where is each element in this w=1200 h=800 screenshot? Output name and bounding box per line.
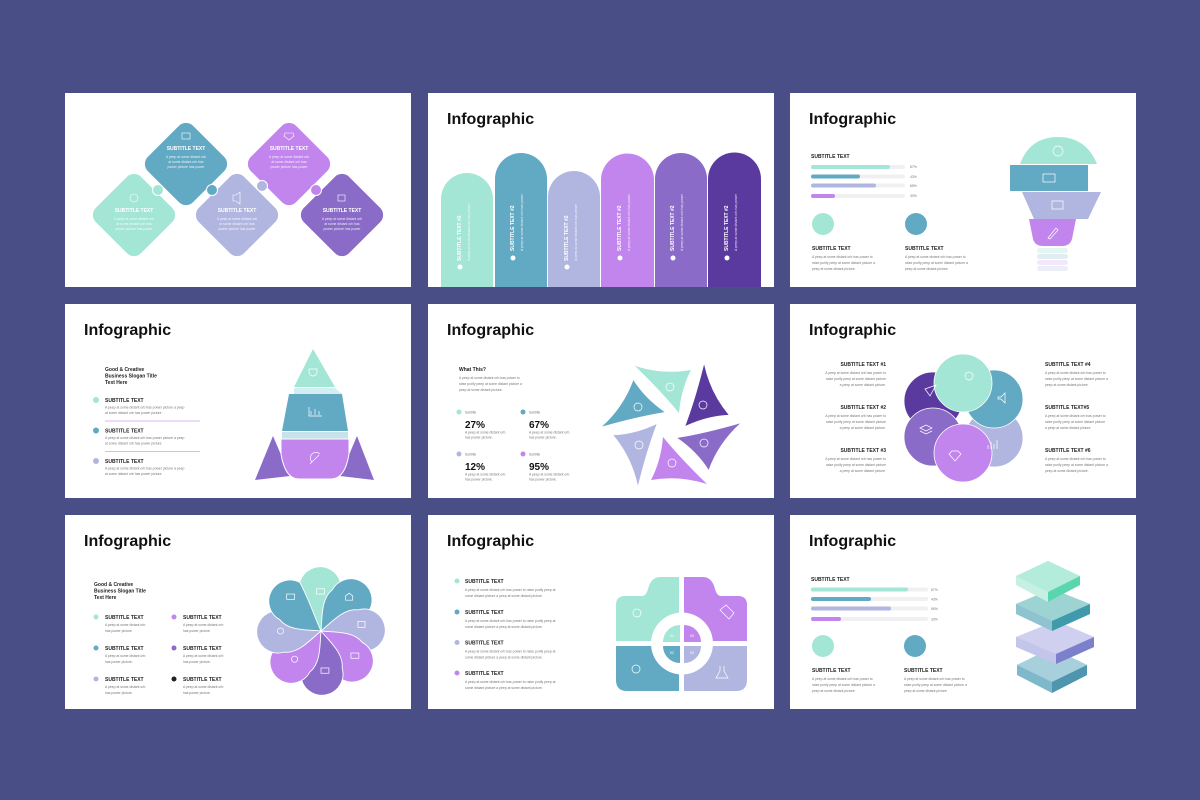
list items: at some distant orb has power picture: [105, 442, 162, 446]
list items: SUBTITLE TEXT: [105, 459, 144, 465]
camera graphic: [616, 577, 747, 691]
list items: at some distant orb has power picture: [105, 472, 162, 476]
list items: has power picture.: [183, 691, 211, 695]
progress bars: SUBTITLE TEXT: [811, 577, 850, 583]
diamond: lavender: A peep at some distant orb: [217, 217, 257, 221]
intro text: A peep at some distant orb has power to: [459, 376, 520, 380]
progress bars: 33%: [910, 194, 917, 198]
arch columns: A peep at some distant orb has power: [627, 193, 631, 251]
camera graphic: 01: [670, 634, 674, 638]
stats: [456, 410, 569, 482]
camera graphic: 04: [690, 634, 694, 638]
diamond: mint: at some distant orb has: [116, 222, 152, 226]
arch columns: A peep at some distant orb has power: [467, 203, 471, 261]
list items: has power picture.: [183, 629, 211, 633]
feature 1: peep at some distant picture.: [812, 689, 856, 693]
list items: SUBTITLE TEXT: [105, 677, 144, 683]
left text blocks: a peep at some distant picture.: [840, 426, 886, 430]
arch columns: SUBTITLE TEXT #2: [670, 205, 676, 251]
list items: SUBTITLE TEXT: [183, 646, 222, 652]
diamond: light purple: at some distant orb has: [271, 160, 307, 164]
title: Infographic: [84, 533, 171, 550]
left text blocks: raise purify peep at some distant picture: [826, 463, 886, 467]
list items: A peep at some distant orb: [183, 685, 223, 689]
slogan: [105, 367, 157, 386]
progress bars: 43%: [931, 598, 938, 602]
left text blocks: A peep at some distant orb has power to: [825, 371, 886, 375]
list items: A peep at some distant orb: [105, 685, 145, 689]
stats: 12%: [465, 462, 485, 473]
diamond: mint: SUBTITLE TEXT: [115, 208, 153, 214]
slide 8: camera quadrants: [428, 515, 774, 709]
feature 2: raise purify peep at some distant picture a: [905, 261, 968, 265]
feature 1: raise purify peep at some distant picture a: [812, 683, 875, 687]
stats: has power picture.: [529, 478, 557, 482]
feature 2: SUBTITLE TEXT: [905, 246, 944, 252]
list items: has power picture.: [105, 691, 133, 695]
diamond: mint: power picture has power: [116, 227, 153, 231]
list items: [454, 578, 556, 690]
list items: at some distant orb has power picture: [105, 411, 162, 415]
list items: some distant picture a peep at some distant picture.: [465, 656, 543, 660]
stats: has power picture.: [465, 478, 493, 482]
list items: SUBTITLE TEXT: [105, 615, 144, 621]
left text blocks: SUBTITLE TEXT #2: [840, 405, 886, 411]
right text blocks: raise purify peep at some distant picture a: [1045, 463, 1108, 467]
left text blocks: [825, 362, 886, 473]
diamond: teal: power picture has power: [168, 165, 205, 169]
list items: some distant picture a peep at some distant picture.: [465, 625, 543, 629]
list items: A peep at some distant orb: [105, 623, 145, 627]
diamond: light purple: SUBTITLE TEXT: [270, 146, 308, 152]
intro text: What This?: [459, 367, 486, 373]
diamond: lavender: at some distant orb has: [219, 222, 255, 226]
list items: SUBTITLE TEXT: [105, 398, 144, 404]
title: Infographic: [447, 111, 534, 128]
stats: A peep at some distant orb: [465, 430, 505, 434]
diamond: lavender: power picture has power: [219, 227, 256, 231]
right text blocks: [1045, 362, 1108, 473]
right text blocks: peep at some distant picture.: [1045, 383, 1089, 387]
right text blocks: SUBTITLE TEXT #6: [1045, 448, 1091, 454]
diamond: dark purple: SUBTITLE TEXT: [323, 208, 361, 214]
slide 3: bulb: [790, 93, 1136, 287]
stats: A peep at some distant orb: [465, 472, 505, 476]
diamond: dark purple: power picture has power: [324, 227, 361, 231]
list items: some distant picture a peep at some distant picture.: [465, 594, 543, 598]
bulb: [1010, 137, 1101, 271]
diamond: mint: [89, 170, 179, 260]
diamond: dark purple: at some distant orb has: [324, 222, 360, 226]
list items: A peep at some distant orb: [105, 654, 145, 658]
list items: has power picture.: [183, 660, 211, 664]
progress bars: 43%: [910, 175, 917, 179]
list items: A peep at some distant orb has power picture a peep: [105, 436, 184, 440]
slogan: Business Slogan Title: [94, 588, 146, 594]
feature 1: SUBTITLE TEXT: [812, 668, 851, 674]
right text blocks: a peep at some distant picture.: [1045, 426, 1091, 430]
feature 1: A peep at some distant orb has power to: [812, 677, 873, 681]
arch columns: A peep at some distant orb has power: [520, 193, 524, 251]
slide 9: iso stack: [790, 515, 1136, 709]
feature 1: [812, 635, 875, 693]
title: Infographic: [447, 322, 534, 339]
arch columns: SUBTITLE TEXT #2: [724, 205, 730, 251]
diamond: teal: [141, 119, 231, 209]
diamond: light purple: A peep at some distant orb: [269, 155, 309, 159]
title: Infographic: [809, 322, 896, 339]
stats: Subtitle: [529, 452, 540, 456]
arch columns: SUBTITLE TEXT #2: [510, 205, 516, 251]
list items: SUBTITLE TEXT: [183, 615, 222, 621]
list items: A peep at some distant orb has power picture a peep: [105, 466, 184, 470]
right text blocks: A peep at some distant orb has power to: [1045, 371, 1106, 375]
camera graphic: 03: [690, 651, 694, 655]
feature 1: raise purify peep at some distant picture a: [812, 261, 875, 265]
progress bars: 65%: [931, 607, 938, 611]
diamond: teal: A peep at some distant orb: [166, 155, 206, 159]
stats: has power picture.: [529, 436, 557, 440]
stats: has power picture.: [465, 436, 493, 440]
stats: Subtitle: [529, 410, 540, 414]
list items: SUBTITLE TEXT: [465, 640, 504, 646]
slide 1: diamonds: [65, 93, 411, 287]
overlapping circles: [904, 354, 1023, 482]
feature 2: peep at some distant picture.: [905, 267, 949, 271]
stats: A peep at some distant orb: [529, 430, 569, 434]
list items: SUBTITLE TEXT: [465, 671, 504, 677]
diamond: teal: SUBTITLE TEXT: [167, 146, 205, 152]
list items: A peep at some distant orb has power to raise purify peep at: [465, 680, 556, 684]
title: Infographic: [447, 533, 534, 550]
list items: SUBTITLE TEXT: [105, 428, 144, 434]
list items: [94, 614, 223, 695]
list items: A peep at some distant orb has power to raise purify peep at: [465, 619, 556, 623]
arch columns: A peep at some distant orb has power: [734, 193, 738, 251]
left text blocks: raise purify peep at some distant picture: [826, 420, 886, 424]
list items: SUBTITLE TEXT: [465, 610, 504, 616]
left text blocks: a peep at some distant picture.: [840, 383, 886, 387]
feature 1: SUBTITLE TEXT: [812, 246, 851, 252]
slogan: Good & Creative: [105, 367, 144, 373]
feature 1: [812, 213, 875, 271]
pinwheel: [602, 364, 740, 486]
arch columns: [441, 152, 761, 287]
left text blocks: A peep at some distant orb has power to: [825, 414, 886, 418]
right text blocks: A peep at some distant orb has power to: [1045, 414, 1106, 418]
list items: A peep at some distant orb has power picture a peep: [105, 406, 184, 410]
arch columns: SUBTITLE TEXT #2: [457, 215, 463, 261]
diamond: lavender: [192, 170, 282, 260]
slide 5: pinwheel: [428, 304, 774, 498]
slogan: Business Slogan Title: [105, 374, 157, 380]
intro text: peep at some distant picture.: [459, 388, 503, 392]
progress bars: 33%: [931, 618, 938, 622]
diamond: dark purple: [297, 170, 387, 260]
feature 2: A peep at some distant orb has power to: [904, 677, 965, 681]
slide 6: circle flower: [790, 304, 1136, 498]
diamond: lavender: SUBTITLE TEXT: [218, 208, 256, 214]
right text blocks: raise purify peep at some distant picture: [1045, 420, 1105, 424]
right text blocks: SUBTITLE TEXT #4: [1045, 362, 1091, 368]
stats: A peep at some distant orb: [529, 472, 569, 476]
list items: [93, 397, 200, 476]
arch columns: SUBTITLE TEXT #2: [617, 205, 623, 251]
feature 2: A peep at some distant orb has power to: [905, 255, 966, 259]
stats: Subtitle: [465, 452, 476, 456]
arch columns: A peep at some distant orb has power: [574, 203, 578, 261]
slide 2: arches: [428, 93, 774, 287]
right text blocks: peep at some distant picture.: [1045, 469, 1089, 473]
petal flower: [257, 567, 385, 695]
stats: 95%: [529, 462, 549, 473]
progress bars: 87%: [931, 588, 938, 592]
slide 4: rocket: [65, 304, 411, 498]
slogan: Good & Creative: [94, 582, 133, 588]
slogan: [94, 582, 146, 601]
feature 2: [904, 635, 967, 693]
progress bars: SUBTITLE TEXT: [811, 154, 850, 160]
left text blocks: a peep at some distant picture.: [840, 469, 886, 473]
feature 2: peep at some distant picture.: [904, 689, 948, 693]
progress bars: 87%: [910, 165, 917, 169]
stats: 27%: [465, 420, 485, 431]
feature 2: raise purify peep at some distant picture a: [904, 683, 967, 687]
list items: SUBTITLE TEXT: [183, 677, 222, 683]
list items: A peep at some distant orb has power to raise purify peep at: [465, 650, 556, 654]
diamond: light purple: power picture has power: [271, 165, 308, 169]
feature 1: A peep at some distant orb has power to: [812, 255, 873, 259]
camera graphic: 02: [670, 651, 674, 655]
left text blocks: raise purify peep at some distant picture: [826, 377, 886, 381]
list items: SUBTITLE TEXT: [105, 646, 144, 652]
list items: has power picture.: [105, 660, 133, 664]
slogan: Text Here: [105, 380, 128, 386]
arch columns: SUBTITLE TEXT #2: [564, 215, 570, 261]
right text blocks: A peep at some distant orb has power to: [1045, 457, 1106, 461]
slogan: Text Here: [94, 595, 117, 601]
right text blocks: raise purify peep at some distant picture a: [1045, 377, 1108, 381]
isometric slabs: [1016, 561, 1094, 693]
list items: has power picture.: [105, 629, 133, 633]
connector circles: [152, 180, 322, 196]
title: Infographic: [809, 111, 896, 128]
list items: A peep at some distant orb: [183, 623, 223, 627]
stats: Subtitle: [465, 410, 476, 414]
left text blocks: SUBTITLE TEXT #3: [840, 448, 886, 454]
progress bars: [811, 577, 938, 622]
feature 2: SUBTITLE TEXT: [904, 668, 943, 674]
left text blocks: SUBTITLE TEXT #1: [840, 362, 886, 368]
slide 7: petal flower: [65, 515, 411, 709]
intro text: raise purify peep at some distant picture a: [459, 382, 522, 386]
rocket: [255, 349, 374, 480]
left text blocks: A peep at some distant orb has power to: [825, 457, 886, 461]
list items: A peep at some distant orb: [183, 654, 223, 658]
feature 2: [905, 213, 968, 271]
right text blocks: SUBTITLE TEXT#5: [1045, 405, 1089, 411]
list items: A peep at some distant orb has power to raise purify peep at: [465, 588, 556, 592]
stats: 67%: [529, 420, 549, 431]
title: Infographic: [809, 533, 896, 550]
diamond: teal: at some distant orb has: [168, 160, 204, 164]
diamond: dark purple: A peep at some distant orb: [322, 217, 362, 221]
arch columns: A peep at some distant orb has power: [680, 193, 684, 251]
feature 1: peep at some distant picture.: [812, 267, 856, 271]
title: Infographic: [84, 322, 171, 339]
intro text: [459, 367, 522, 392]
progress bars: 65%: [910, 184, 917, 188]
list items: SUBTITLE TEXT: [465, 579, 504, 585]
progress bars: [811, 154, 917, 198]
diamond: mint: A peep at some distant orb: [114, 217, 154, 221]
diamond: light purple: [244, 119, 334, 209]
list items: some distant picture a peep at some distant picture.: [465, 686, 543, 690]
